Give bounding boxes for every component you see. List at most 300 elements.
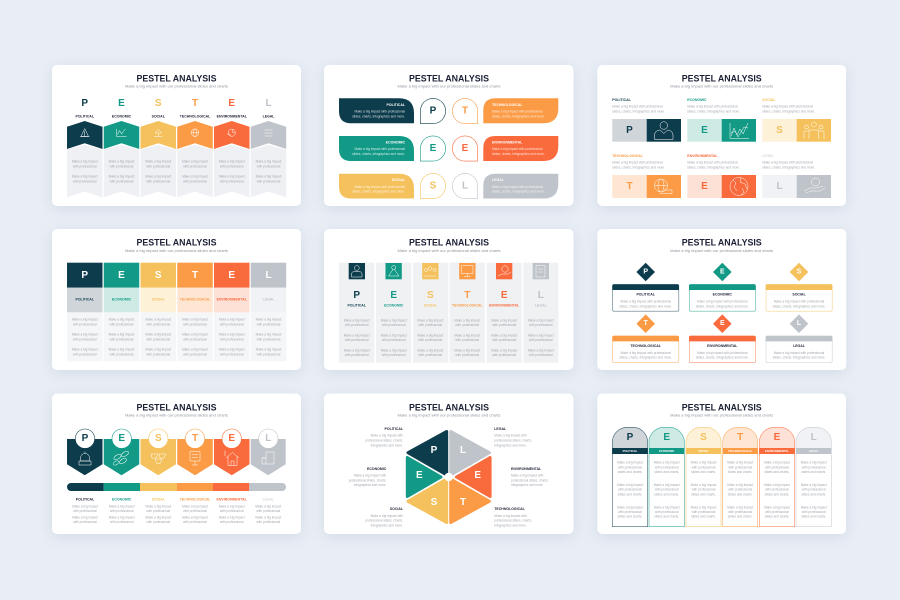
bar: technological: slides, charts, infographics and more. [492,114,545,118]
column: economic [104,429,139,524]
block: legal [762,154,831,198]
card: technological: TECHNOLOGICAL [630,344,662,348]
title: PESTEL ANALYSIS [682,402,762,412]
column: economic: E [118,270,125,281]
bar: social: slides, charts, infographics and more. [352,189,405,193]
text: economic: with professional [110,164,134,168]
text: social: Make a big impact [145,504,171,508]
column: political: POLITICAL [347,303,367,307]
column: environmental: E [228,433,235,444]
card: technological: T [644,320,649,327]
icon: people [154,130,162,136]
column: political [339,263,374,363]
block: economic: Make a big impact with professional [687,105,738,109]
text: social: Make a big impact [691,461,717,465]
card: economic: slides, charts, infographics and more. [696,304,749,308]
column: legal: L [811,432,817,443]
text: social: with professional [146,352,170,356]
callout: legal [494,427,532,447]
column: social: S [700,432,707,443]
text: social: with professional [146,179,170,183]
text: economic: with professional [382,338,406,342]
card: environmental: E [720,320,725,327]
column: political: P [353,290,360,301]
column: environmental: E [228,98,235,109]
title: PESTEL ANALYSIS [409,74,489,84]
text: political: with professional [345,323,369,327]
text: social: slides and charts. [691,515,716,519]
card: social: slides, charts, infographics and more. [773,304,826,308]
teardrop: P: P [430,106,437,116]
callout: economic [349,467,387,487]
text: environmental [491,318,517,357]
callout: legal: professional slides, charts, [494,439,532,443]
column: social [140,263,176,361]
icon: hand with globe [498,266,511,276]
text: political: with professional [73,520,97,524]
text: political: Make a big impact [72,175,98,179]
text: environmental: Make a big impact [219,160,245,164]
panel: table columns slide [52,229,301,370]
text: environmental: slides and charts. [765,470,790,474]
text: technological: with professional [183,352,207,356]
text: environmental: Make a big impact [219,504,245,508]
text: legal: Make a big impact [256,160,282,164]
icon: coins [113,450,129,466]
text: technological [454,318,480,357]
callout: economic: ECONOMIC [367,467,387,471]
card: technological: Make a big impact with professional [620,351,671,355]
text: technological [182,160,208,183]
bar: environmental [483,136,558,161]
callout: social: SOCIAL [390,507,404,511]
column: economic [376,263,411,363]
callout: social: infographics and more. [371,523,403,527]
card: economic [689,263,756,311]
block: economic: slides, charts, infographics and more. [687,110,740,114]
text: legal: Make a big impact [801,483,827,487]
text: environmental: with professional [220,337,244,341]
column: political: POLITICAL [76,114,95,118]
text: political: with professional [73,322,97,326]
text: technological: with professional [728,465,752,469]
text: technological: with professional [183,179,207,183]
text: technological: Make a big impact [727,483,753,487]
text: environmental: Make a big impact [491,333,517,337]
text: environmental [219,160,245,183]
block: environmental: Make a big impact with professional [687,161,738,165]
text: political [344,318,370,357]
text: environmental: with professional [492,353,516,357]
block: legal: Make a big impact with professional [762,161,813,165]
bar: environmental: Make a big impact with professional [492,147,543,151]
teardrop: S [420,173,446,199]
text: political: Make a big impact [72,333,98,337]
bar: economic [339,136,414,161]
block: economic: ECONOMIC [687,98,707,102]
text: economic: with professional [110,322,134,326]
column: political: P [81,270,88,281]
column: social: S [155,433,162,444]
bar: economic: Make a big impact with professional [354,147,405,151]
icon: person [654,122,673,140]
column: technological: T [192,270,198,281]
text: environmental: with professional [492,338,516,342]
teardrop: E red [452,136,478,161]
subtitle: Make a big impact with our professional slides and charts [125,249,228,253]
text: legal: Make a big impact [528,318,554,322]
bar: technological: Make a big impact with professional [492,110,543,114]
icon: group of people [804,122,824,139]
icon: documents [262,452,274,464]
column: economic: ECONOMIC [384,303,404,307]
column: environmental: E [501,290,508,301]
text: environmental: with professional [220,509,244,513]
block: economic [687,98,756,142]
teardrop: E teal [420,136,446,161]
text: technological: Make a big impact [182,504,208,508]
text: legal: Make a big impact [256,175,282,179]
text: social: Make a big impact [417,318,443,322]
text: environmental [219,318,245,356]
block: political: slides, charts, infographics and more. [612,110,665,114]
text: technological: slides and charts. [728,492,753,496]
text: environmental: with professional [220,520,244,524]
card: legal: Make a big impact with professional [774,351,825,355]
column: political [67,263,102,361]
card: legal [766,314,832,363]
column: technological: T [192,433,198,444]
card: environmental: slides, charts, infographics and more. [696,356,749,360]
text: technological: with professional [455,353,479,357]
bar: environmental: ENVIRONMENTAL [492,140,523,144]
column: technological: TECHNOLOGICAL [180,298,211,302]
icon: linked hexagons [151,454,166,464]
text: political: with professional [73,509,97,513]
column: legal: L [265,270,272,281]
timeline bar [67,483,286,491]
column: technological [177,263,213,361]
callout: environmental [511,467,549,487]
callout: economic: professional slides, charts, [349,478,386,482]
block: environmental: slides, charts, infographics and more. [687,166,740,170]
text: technological: with professional [183,322,207,326]
segment: P: P [431,445,438,456]
column: environmental: ENVIRONMENTAL [217,114,248,118]
text: political: with professional [618,510,642,514]
text: legal: with professional [529,338,553,342]
segment: L: L [460,445,466,456]
title: PESTEL ANALYSIS [136,402,216,412]
text: social: with professional [692,465,716,469]
bar: economic: ECONOMIC [386,140,405,144]
text: economic [109,504,135,524]
column: legal: L [265,98,272,109]
icon: earth [730,178,748,196]
column: environmental [214,98,250,197]
text: technological: Make a big impact [182,160,208,164]
text: environmental: Make a big impact [764,461,790,465]
card: political: POLITICAL [636,292,656,296]
column: technological: T [464,290,470,301]
block: legal: LEGAL [762,154,774,158]
title: PESTEL ANALYSIS [409,238,489,248]
text: technological: slides and charts. [728,470,753,474]
text: political: with professional [73,352,97,356]
bar: social: Make a big impact with professional [354,185,405,189]
text: legal: with professional [529,323,553,327]
text: social [691,461,717,519]
text: legal: with professional [802,488,826,492]
column: legal [251,429,286,524]
text: legal: Make a big impact [528,333,554,337]
card: economic: Make a big impact with professional [697,300,748,304]
text: economic: Make a big impact [109,333,135,337]
text: political [617,461,643,519]
text: legal: Make a big impact [256,318,282,322]
column: environmental: ENVIRONMENTAL [217,298,248,302]
text: legal: slides and charts. [801,515,826,519]
text: economic: Make a big impact [381,333,407,337]
text: environmental: with professional [220,164,244,168]
column: technological: TECHNOLOGICAL [180,114,211,118]
callout: political: Make a big impact with [371,434,403,438]
text: legal: Make a big impact [256,348,282,352]
icon: bell [79,452,91,465]
text: technological: Make a big impact [454,318,480,322]
text: social: with professional [146,509,170,513]
text: economic: Make a big impact [109,318,135,322]
block: technological: Make a big impact with professional [612,161,663,165]
text: economic: Make a big impact [109,504,135,508]
text: social [145,318,171,356]
text: economic [109,160,135,183]
card: environmental: Make a big impact with professional [697,351,748,355]
column: social: SOCIAL [152,298,166,302]
icon: podium [80,128,90,136]
segment: T: T [460,497,466,508]
text: social: Make a big impact [145,333,171,337]
column: social: S [155,98,162,109]
text: environmental: Make a big impact [219,175,245,179]
text: economic: Make a big impact [109,348,135,352]
icon: chart [116,129,126,136]
text: technological: with professional [183,164,207,168]
bar: legal: LEGAL [492,178,505,182]
text: political [72,160,98,183]
text: legal: Make a big impact [801,461,827,465]
text: legal: with professional [257,164,281,168]
column: legal [796,427,831,527]
card: legal: L [797,320,802,327]
card: legal: slides, charts, infographics and more. [773,356,826,360]
icon: earth [227,129,235,136]
text: technological [182,318,208,356]
text: economic: with professional [382,323,406,327]
text: economic: Make a big impact [109,175,135,179]
text: economic: Make a big impact [109,515,135,519]
teardrop: T: T [462,106,468,116]
callout: environmental: Make a big impact with [511,474,544,478]
block: legal: slides, charts, infographics and more. [762,166,815,170]
text: political: Make a big impact [344,333,370,337]
text: legal [256,160,282,183]
card: legal: LEGAL [793,344,806,348]
text: technological: with professional [728,488,752,492]
bar: political [339,98,414,123]
text: legal: with professional [257,322,281,326]
callout: environmental: ENVIRONMENTAL [511,467,542,471]
card: economic: E [720,268,725,276]
column: technological: TECHNOLOGICAL [728,449,753,453]
subtitle: Make a big impact with our professional slides and charts [398,85,501,89]
text: legal: Make a big impact [801,505,827,509]
title: PESTEL ANALYSIS [682,74,762,84]
text: economic: with professional [110,509,134,513]
callout: technological [494,507,532,527]
bar: political: Make a big impact with professional [354,110,405,114]
column: legal: LEGAL [809,449,819,453]
column: economic: ECONOMIC [112,114,132,118]
subtitle: Make a big impact with our professional slides and charts [670,413,773,417]
callout: environmental: infographics and more. [511,483,544,487]
text: social: with professional [418,338,442,342]
bar: political: POLITICAL [387,103,406,107]
text: technological: Make a big impact [182,333,208,337]
card: political [612,263,679,311]
column: economic [649,427,684,527]
callout: political: POLITICAL [385,427,404,431]
text: legal [801,461,827,519]
block: environmental: E [701,181,708,192]
text: economic: with professional [110,520,134,524]
text: environmental: with professional [220,352,244,356]
text: political: Make a big impact [617,505,643,509]
block: legal: L [776,181,783,192]
title: PESTEL ANALYSIS [682,238,762,248]
callout: social: professional slides, charts, [365,519,403,523]
text: environmental: with professional [765,510,789,514]
card: social [766,263,832,311]
icon: person [352,266,362,277]
text: environmental: Make a big impact [764,505,790,509]
bar: social [339,174,414,198]
text: legal: Make a big impact [528,348,554,352]
column: social: SOCIAL [152,114,166,118]
text: economic: Make a big impact [109,160,135,164]
column: legal: L [265,433,271,444]
panel: chevron columns slide [52,65,301,206]
text: technological [182,504,208,524]
subtitle: Make a big impact with our professional slides and charts [125,413,228,417]
text: political: Make a big impact [72,160,98,164]
text: political: slides and charts. [618,492,643,496]
block: political: POLITICAL [612,98,632,102]
text: environmental: Make a big impact [491,348,517,352]
card: political: Make a big impact with professional [620,300,671,304]
bar: legal: Make a big impact with professional [492,185,543,189]
text: environmental: Make a big impact [491,318,517,322]
callout: legal: LEGAL [494,427,507,431]
bar: environmental: slides, charts, infographics and more. [492,152,545,156]
column: social [686,427,721,527]
text: technological: with professional [455,323,479,327]
text: environmental: with professional [765,488,789,492]
block: social: slides, charts, infographics and more. [762,110,815,114]
column: social [140,429,176,524]
icon: hand holding leaf [804,178,825,193]
column: social: SOCIAL [152,497,166,501]
column: economic: E [390,290,397,301]
panel: hexagon wheel slide [324,394,574,534]
icon: document [264,130,272,136]
icon: monitor [190,452,200,465]
text: technological: slides and charts. [728,515,753,519]
block: social [762,98,831,142]
text: social: with professional [146,520,170,524]
subtitle: Make a big impact with our professional slides and charts [670,249,773,253]
text: economic [381,318,407,357]
text: political: with professional [73,337,97,341]
text: economic: Make a big impact [654,461,680,465]
text: economic: with professional [655,465,679,469]
text: environmental [764,461,790,519]
bar: technological [483,98,558,123]
subtitle: Make a big impact with our professional slides and charts [398,413,501,417]
text: political: Make a big impact [617,483,643,487]
text: environmental: Make a big impact [219,515,245,519]
text: legal [528,318,554,357]
column: political: P [82,433,89,444]
column: political: POLITICAL [623,449,638,453]
text: economic: Make a big impact [654,483,680,487]
text: social: Make a big impact [691,505,717,509]
column: environmental: ENVIRONMENTAL [489,303,520,307]
bar: social: SOCIAL [392,178,406,182]
block: technological: T [626,181,633,192]
text: environmental: Make a big impact [219,318,245,322]
block: political: Make a big impact with professional [612,105,663,109]
column: economic [104,98,139,197]
text: social: with professional [146,337,170,341]
text: environmental: with professional [220,322,244,326]
block: social: S [776,125,783,136]
text: legal: slides and charts. [801,470,826,474]
text: technological: Make a big impact [182,318,208,322]
teardrop: T [452,98,478,124]
text: legal: Make a big impact [256,333,282,337]
column: environmental [214,263,250,361]
text: social: Make a big impact [145,348,171,352]
text: political: with professional [345,353,369,357]
text: political: with professional [345,338,369,342]
column: economic: E [118,98,125,109]
text: environmental: slides and charts. [765,492,790,496]
panel: pennants and timeline slide [52,394,301,534]
text: legal: with professional [802,465,826,469]
card: environmental: ENVIRONMENTAL [707,344,738,348]
text: legal: with professional [256,520,280,524]
text: political: Make a big impact [617,461,643,465]
subtitle: Make a big impact with our professional slides and charts [670,85,773,89]
text: technological: with professional [728,510,752,514]
column: economic: ECONOMIC [659,449,674,453]
card: political: P [643,268,648,276]
block: technological: TECHNOLOGICAL [612,154,644,158]
panel: teardrop bars slide [324,65,574,206]
panel: diamond cards slide [597,229,846,370]
callout: technological: Make a big impact with [494,514,527,518]
